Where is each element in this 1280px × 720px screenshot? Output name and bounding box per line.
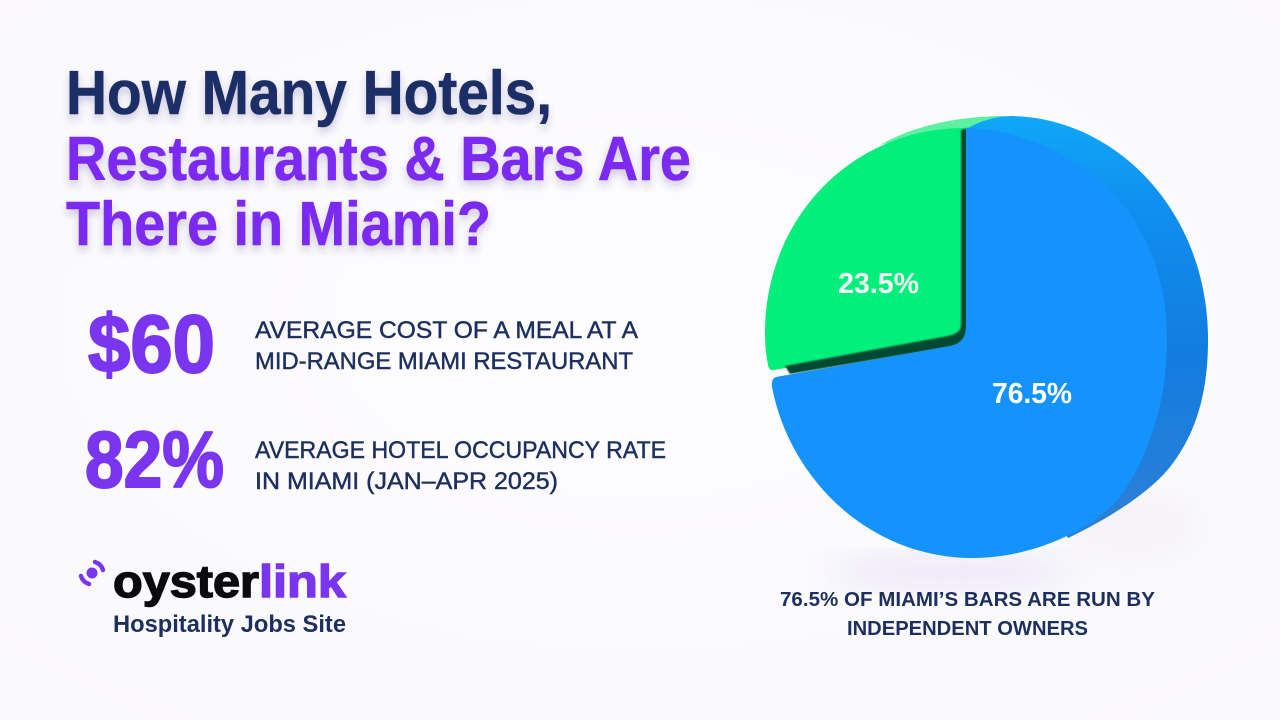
stat: average meal cost [88,299,639,390]
label: 76.5%: 76.5% [992,378,1072,410]
green slice rim [880,116,1005,145]
slice: green 23.5% [765,128,965,370]
logo tagline: Hospitality Jobs Site [113,611,346,638]
stat description: occupancy: IN MIAMI (JAN–APR 2025) [255,468,558,495]
logo: oysterlink: link [259,556,347,607]
stat value: $60: $60 [88,299,215,390]
title [66,59,691,259]
logo wordmark: oyster [113,556,259,607]
stat description: occupancy: AVERAGE HOTEL OCCUPANCY RATE [255,437,666,464]
stat value: 82%: 82% [85,415,224,504]
ground shadow [825,560,1075,584]
pie side wall [965,116,1208,538]
stat description: meal cost: AVERAGE COST OF A MEAL AT A [255,317,639,344]
3D pie chart [765,116,1208,584]
label: 23.5%: 23.5% [838,268,919,300]
chart caption: INDEPENDENT OWNERS [847,617,1088,640]
stat description: occupancy [255,437,666,495]
stat: hotel occupancy [85,415,666,504]
title: How Many Hotels, [66,59,552,128]
stat description: meal cost [255,317,639,375]
icon: oyster logo mark [81,562,103,584]
chart caption: 76.5% OF MIAMI’S BARS ARE RUN BY [780,588,1155,611]
chart caption [780,588,1155,640]
stat description: meal cost: MID-RANGE MIAMI RESTAURANT [255,348,633,375]
logo: oysterlink [81,556,347,638]
title: Restaurants & Bars Are [66,125,691,194]
slice gap shadow [785,128,968,374]
slice: blue 76.5% [772,128,1167,558]
title: There in Miami? [66,190,491,259]
